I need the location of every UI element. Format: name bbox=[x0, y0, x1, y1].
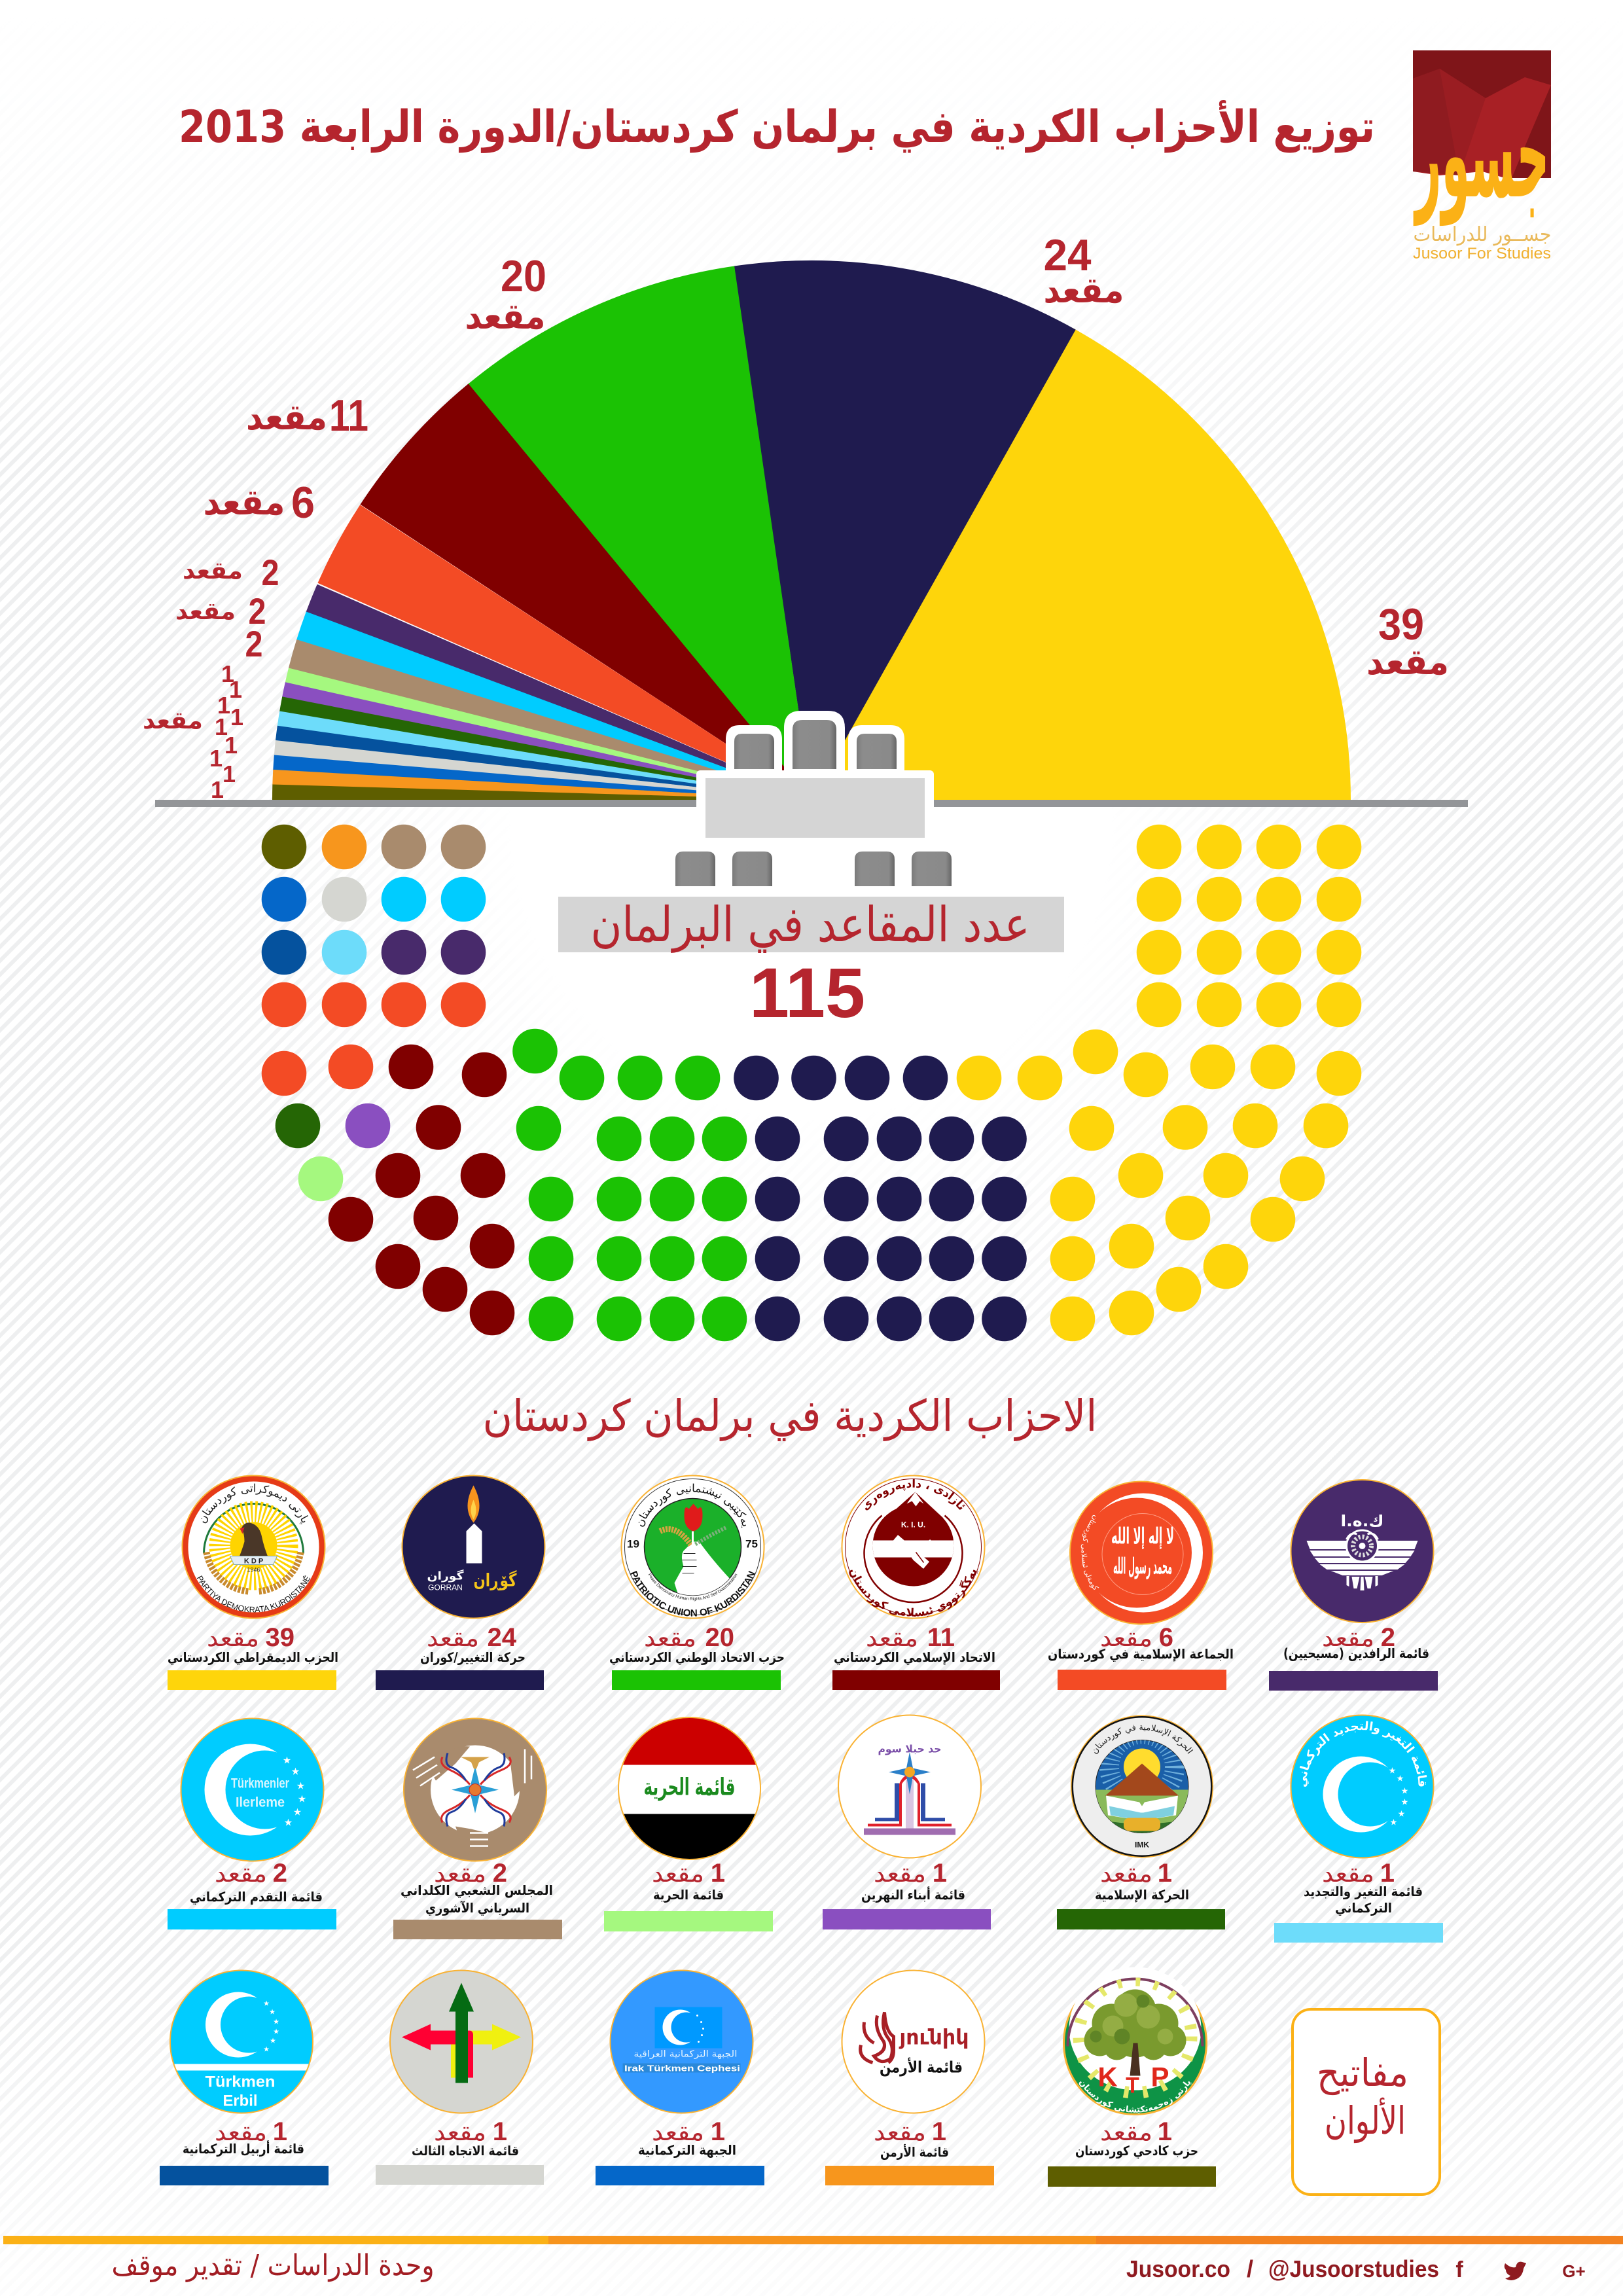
colour key bbox=[825, 2166, 994, 2185]
party card: KDP bbox=[168, 1475, 338, 1690]
seat count bbox=[644, 1623, 734, 1652]
party card: Gorran bbox=[376, 1475, 544, 1690]
seat labels on chart: 24 bbox=[1043, 230, 1092, 280]
logo: KTP tree bbox=[1063, 1967, 1207, 2115]
logo: Turkmen Progress bbox=[181, 1719, 323, 1861]
colour key bbox=[168, 1670, 336, 1690]
logo: Turkmen Change and Renewal: ★ bbox=[1390, 1818, 1397, 1827]
seat count: مقعد bbox=[652, 2119, 704, 2146]
logo: Iraqi Turkmen Front: الجبهة التركمانية العراقية bbox=[633, 2049, 737, 2059]
party card: Turkmen Front bbox=[596, 1970, 764, 2185]
logo: PUK: 75 bbox=[745, 1538, 758, 1550]
logo: PUK bbox=[620, 1475, 764, 1619]
seat count: مقعد bbox=[215, 2119, 267, 2146]
seat count: مقعد bbox=[1100, 1625, 1152, 1652]
dots: navy bbox=[734, 1056, 1027, 1341]
logo: Jusoor for Studies: Jusoor For Studies bbox=[1413, 245, 1551, 262]
seat count bbox=[427, 1623, 517, 1652]
party name: الجماعة الإسلامية في كوردستان bbox=[1048, 1646, 1234, 1662]
party card: Third Direction bbox=[376, 1970, 544, 2185]
seat count: 6 bbox=[1159, 1623, 1173, 1652]
logo: Jusoor for Studies: جســور للدراسات bbox=[1414, 223, 1551, 246]
party name: المجلس الشعبي الكلداني bbox=[401, 1882, 553, 1899]
logo: Turkmen Erbil: ★ bbox=[263, 1999, 270, 2008]
footer: unit label: وحدة الدراسات / تقدير موقف bbox=[111, 2249, 435, 2282]
logo: Turkmen Progress: Ilerleme bbox=[236, 1795, 285, 1810]
seat count: 1 bbox=[493, 2117, 507, 2146]
party name: حركة التغيير/كوران bbox=[420, 1649, 526, 1665]
seat count: 11 bbox=[927, 1623, 955, 1652]
logo: PUK: 19 bbox=[627, 1538, 639, 1550]
dots: yellow bbox=[957, 825, 1361, 1341]
seat count: مقعد bbox=[1322, 1625, 1374, 1652]
logo: Gorran candle bbox=[402, 1475, 544, 1618]
logo: KDP bbox=[182, 1475, 325, 1618]
dots: tan bbox=[382, 825, 486, 869]
seat count bbox=[866, 1623, 955, 1652]
seat count bbox=[215, 2117, 287, 2146]
logo: Turkmen Erbil: ★ bbox=[273, 2028, 279, 2036]
seat labels on chart: 1 bbox=[215, 713, 228, 740]
logo: Sons of Two Rivers bbox=[838, 1715, 981, 1857]
logo: Turkmen Progress: ★ bbox=[296, 1780, 305, 1792]
logo: Gorran candle: GORRAN bbox=[428, 1583, 463, 1592]
party name: قائمة أربيل التركمانية bbox=[183, 2140, 304, 2157]
seat labels on chart: مقعد bbox=[1366, 641, 1449, 683]
seat count: 1 bbox=[932, 2117, 946, 2146]
logo: KIU: ئازادی ، دادپەروەری bbox=[865, 1479, 965, 1511]
logo: Armenian list: յունիկ bbox=[899, 2025, 969, 2050]
party name: قائمة أبناء النهرين bbox=[861, 1886, 965, 1903]
colour key bbox=[376, 1670, 544, 1690]
logo: Islamic Group bbox=[1070, 1482, 1213, 1624]
logo: KIU: K. I. U. bbox=[901, 1520, 925, 1529]
logo: Turkmen Erbil: Erbil bbox=[223, 2092, 258, 2110]
colour key bbox=[832, 1670, 1000, 1690]
seat labels on chart: 2 bbox=[262, 552, 279, 593]
logo: Turkmen Progress: ★ bbox=[298, 1793, 306, 1805]
colour key bbox=[1057, 1909, 1225, 1929]
baseline bar bbox=[155, 800, 1468, 807]
party card: Chaldean Syriac Assyrian Council bbox=[393, 1719, 562, 1939]
seat labels on chart: 2 bbox=[249, 590, 266, 632]
seat labels on chart: 6 bbox=[291, 478, 315, 528]
party name: حزب كادحي كوردستان bbox=[1075, 2143, 1198, 2159]
logo: Turkmen Erbil: ★ bbox=[269, 2008, 276, 2016]
seat count: مقعد bbox=[434, 1861, 486, 1888]
dots: maroon bbox=[329, 1045, 514, 1335]
seat count: مقعد bbox=[874, 1861, 926, 1888]
logo: Turkmen Progress: ★ bbox=[284, 1817, 293, 1829]
dots: blues and grey bbox=[262, 877, 486, 975]
seat labels on chart bbox=[143, 230, 1449, 803]
seat labels on chart: 1 bbox=[211, 776, 224, 803]
logo: Turkmen Progress: ★ bbox=[291, 1766, 300, 1778]
logo: KIU bbox=[842, 1475, 986, 1619]
colour key bbox=[1269, 1671, 1438, 1691]
seat count bbox=[434, 2117, 507, 2146]
logo: Islamic Group: لا إله إلا الله bbox=[1111, 1524, 1174, 1550]
seat count: مقعد bbox=[874, 2119, 926, 2146]
seat count: مقعد bbox=[215, 1861, 267, 1888]
logo: Turkmen Change and Renewal: ★ bbox=[1397, 1774, 1404, 1784]
party card: Islamic Group bbox=[1048, 1482, 1234, 1690]
logo: KTP tree: K bbox=[1097, 2062, 1118, 2092]
footer colour bar bbox=[3, 2236, 1623, 2244]
logo: PUK: یەکێتیی نیشتمانیی کوردستان bbox=[639, 1483, 747, 1528]
seat labels on chart: مقعد bbox=[143, 708, 203, 734]
logo: Islamic Movement: الحركة الإسلامية في كوردستان bbox=[1094, 1725, 1194, 1754]
party card: Armenians bbox=[825, 1970, 994, 2185]
party card: Turkmen Change and Renewal bbox=[1274, 1715, 1443, 1943]
party name: حزب الاتحاد الوطني الكردستاني bbox=[609, 1649, 785, 1666]
party card: Kurdistan Toilers bbox=[1048, 1967, 1216, 2187]
logo: Turkmen Progress: ★ bbox=[283, 1754, 291, 1766]
logo: Iraqi Turkmen Front: Irak Türkmen Cephesi bbox=[624, 2063, 740, 2073]
seat count bbox=[207, 1623, 294, 1652]
party card: Islamic Movement bbox=[1057, 1715, 1225, 1929]
seat labels on chart: مقعد bbox=[1043, 270, 1124, 311]
party name bbox=[401, 1882, 553, 1916]
party name: قائمة الحرية bbox=[653, 1887, 724, 1903]
seat count: 1 bbox=[711, 2117, 725, 2146]
dots: green bbox=[512, 1029, 747, 1341]
party name: السرياني الآشوري bbox=[425, 1900, 529, 1916]
logo: Turkmen Change and Renewal bbox=[1291, 1715, 1433, 1857]
seat count: مقعد bbox=[1322, 1861, 1374, 1888]
seat count: 2 bbox=[493, 1859, 507, 1888]
logo: KIU: یەکگرتووی ئیسلامی کوردستان bbox=[849, 1570, 978, 1617]
party name: قائمة الاتجاه الثالث bbox=[412, 2143, 519, 2159]
logo: Armenian list: قائمة الأرمن bbox=[880, 2058, 963, 2076]
party name bbox=[1304, 1884, 1423, 1916]
icon: google plus: G+ bbox=[1562, 2261, 1586, 2281]
colour key bbox=[168, 1909, 336, 1929]
seat dots: 115 seats bbox=[262, 825, 1361, 1341]
podium: table and chairs bbox=[675, 711, 952, 886]
party card: Rafidain bbox=[1269, 1480, 1438, 1691]
seat count: 39 bbox=[266, 1623, 294, 1652]
seat count: 1 bbox=[933, 1859, 947, 1888]
logo: Turkmen Erbil bbox=[169, 1970, 313, 2113]
logo: Assyrian winged disc: ك.ه.ا bbox=[1340, 1512, 1383, 1530]
logo: Turkmen Change and Renewal: ★ bbox=[1401, 1797, 1408, 1808]
dots: single seats bbox=[276, 1103, 390, 1201]
seat labels on chart: 20 bbox=[501, 251, 546, 301]
seat labels on chart: 2 bbox=[245, 623, 263, 664]
party card: PUK bbox=[609, 1475, 785, 1690]
chart: semicircle parliament seat shares bbox=[432, 420, 1191, 1179]
seat count: 24 bbox=[487, 1623, 517, 1652]
logo: Third Direction arrows bbox=[390, 1970, 533, 2113]
logo: Freedom List flag bbox=[618, 1716, 762, 1860]
colour key bbox=[604, 1911, 773, 1931]
party name: الاتحاد الإسلامي الكردستاني bbox=[834, 1649, 995, 1666]
logo: KTP tree: پارتی زەحمەتکێشانی کوردستان bbox=[1079, 2081, 1192, 2114]
colour key box bbox=[1293, 2009, 1440, 2195]
seat labels on chart: مقعد bbox=[465, 296, 546, 337]
party name: قائمة التغير والتجديد bbox=[1304, 1884, 1423, 1899]
seat labels on chart: مقعد bbox=[203, 482, 285, 523]
seat count bbox=[215, 1859, 287, 1888]
seat count bbox=[1322, 1623, 1395, 1652]
seat count: 1 bbox=[1158, 1859, 1172, 1888]
seat labels on chart: 39 bbox=[1378, 600, 1424, 649]
logo: Armenian list bbox=[842, 1970, 984, 2113]
logo: KDP: پارتی دیموکراتی کوردستان bbox=[202, 1483, 308, 1524]
logo: Turkmen Erbil: Türkmen bbox=[205, 2073, 275, 2090]
colour key bbox=[160, 2166, 329, 2185]
logo: PUK: Peace Democracy Human Rights And Self Determination bbox=[648, 1573, 738, 1601]
seat count bbox=[1100, 1623, 1173, 1652]
seat count: مقعد bbox=[1100, 2119, 1152, 2146]
party card: Sons of Two Rivers bbox=[823, 1715, 991, 1929]
party card: Turkmen Progress bbox=[168, 1719, 336, 1929]
party card: Freedom List bbox=[604, 1716, 773, 1931]
seat count bbox=[434, 1859, 507, 1888]
party name: قائمة التقدم التركماني bbox=[190, 1889, 323, 1905]
party name: الحركة الإسلامية bbox=[1095, 1887, 1189, 1903]
logo: KDP: K D P bbox=[244, 1558, 263, 1566]
logo: Turkmen Erbil: ★ bbox=[270, 2037, 276, 2045]
seat count: 1 bbox=[273, 2117, 287, 2146]
title: توزيع الأحزاب الكردية في برلمان كردستان/الدورة الرابعة 2013 bbox=[179, 99, 1375, 153]
logo: Gorran candle: گۆڕان bbox=[474, 1570, 517, 1590]
seat labels on chart: 1 bbox=[229, 676, 242, 703]
seat labels on chart: 1 bbox=[209, 745, 223, 772]
seat count bbox=[652, 2117, 725, 2146]
logo: Assyrian winged disc bbox=[1291, 1480, 1433, 1623]
seat count: 1 bbox=[711, 1859, 725, 1888]
seat count bbox=[874, 1859, 947, 1888]
seat count: مقعد bbox=[652, 1861, 704, 1888]
logo: Islamic Movement: IMK bbox=[1135, 1840, 1149, 1850]
logo: Islamic Movement bbox=[1071, 1715, 1213, 1857]
logo: KDP: 1946 bbox=[247, 1567, 260, 1573]
seat count: مقعد bbox=[427, 1625, 479, 1652]
logo: Islamic Group: كومةلى ئيسلامى كوردستان bbox=[1081, 1515, 1099, 1590]
seat labels on chart: مقعد bbox=[183, 558, 243, 584]
seat count: 1 bbox=[1380, 1859, 1395, 1888]
seat labels on chart: 1 bbox=[221, 660, 234, 687]
dots: olive and orange bbox=[262, 825, 366, 869]
footer: website and social: @Jusoorstudies bbox=[1268, 2255, 1439, 2282]
logo: Gorran candle: گوران bbox=[427, 1570, 464, 1583]
logo: Islamic Group: محمد رسول الله bbox=[1113, 1554, 1172, 1580]
logo: KDP: PARTIYA DEMOKRATA KURDISTANÊ bbox=[196, 1575, 310, 1613]
seat count: مقعد bbox=[207, 1625, 259, 1652]
seat count bbox=[1322, 1859, 1395, 1888]
colour key bbox=[612, 1670, 781, 1690]
logo: Assyrian council bbox=[404, 1719, 546, 1861]
logo: Turkmen Progress: ★ bbox=[293, 1806, 302, 1818]
logo: Turkmen Erbil: ★ bbox=[263, 2045, 270, 2054]
logo: Sons of Two Rivers: حد حبلا سوم bbox=[878, 1742, 941, 1755]
seat count: مقعد bbox=[434, 2119, 486, 2146]
seat count bbox=[1100, 1859, 1172, 1888]
seat labels on chart: مقعد bbox=[175, 598, 236, 625]
seat count: مقعد bbox=[1100, 1861, 1152, 1888]
logo: Iraqi Turkmen Front bbox=[610, 1970, 753, 2113]
colour key bbox=[1048, 2166, 1216, 2187]
logo: Turkmen Progress: Türkmenler bbox=[231, 1776, 289, 1791]
dots: orange-red bbox=[262, 982, 486, 1096]
section heading: الاحزاب الكردية في برلمان كردستان bbox=[483, 1391, 1097, 1441]
seat labels on chart: 1 bbox=[217, 692, 230, 719]
party name: قائمة الأرمن bbox=[880, 2144, 949, 2160]
icon: twitter bbox=[1505, 2262, 1526, 2280]
party name: التركماني bbox=[1335, 1900, 1392, 1916]
seat count: 1 bbox=[1158, 2117, 1172, 2146]
party card: KIU bbox=[832, 1475, 1000, 1690]
colour key bbox=[1274, 1923, 1443, 1943]
colour key box: الألوان bbox=[1325, 2097, 1406, 2144]
logo: Turkmen Change and Renewal: ★ bbox=[1398, 1809, 1405, 1820]
seat count: مقعد bbox=[866, 1625, 918, 1652]
colour key bbox=[376, 2165, 544, 2185]
seat labels on chart: 1 bbox=[223, 761, 236, 787]
party name: الجبهة التركمانية bbox=[638, 2142, 736, 2158]
party name: قائمة الرافدين (مسيحيين) bbox=[1283, 1645, 1429, 1661]
logo: Turkmen Change and Renewal: ★ bbox=[1389, 1766, 1396, 1776]
logo: KTP tree: P bbox=[1150, 2062, 1169, 2092]
seat labels on chart: 11 bbox=[329, 391, 368, 440]
footer: website and social: Jusoor.co bbox=[1126, 2255, 1230, 2282]
seat labels on chart: 1 bbox=[224, 732, 238, 759]
seat labels on chart: مقعد bbox=[246, 397, 327, 438]
party name: الحزب الديمقراطي الكردستاني bbox=[168, 1649, 338, 1666]
logo: KTP tree: T bbox=[1126, 2073, 1139, 2098]
colour key bbox=[1058, 1670, 1226, 1690]
seat labels on chart: 1 bbox=[230, 704, 243, 730]
logo: Freedom List flag: قائمة الحرية bbox=[644, 1774, 736, 1801]
colour key bbox=[596, 2166, 764, 2185]
party card: Erbil Turkmen bbox=[160, 1970, 329, 2185]
seat count bbox=[652, 1859, 725, 1888]
logo: Jusoor for Studies bbox=[1413, 50, 1551, 262]
total seats 115: 115 bbox=[749, 953, 865, 1032]
seat count bbox=[874, 2117, 946, 2146]
seat count: 2 bbox=[1381, 1623, 1395, 1652]
colour key box: مفاتيح bbox=[1317, 2051, 1408, 2095]
logo: Turkmen Change and Renewal: قائمة التغير والتجديد التركماني bbox=[1300, 1721, 1427, 1787]
footer: website and social bbox=[1126, 2255, 1586, 2282]
colour key bbox=[393, 1920, 562, 1939]
seat count: 20 bbox=[705, 1623, 734, 1652]
seat count bbox=[1100, 2117, 1172, 2146]
colour key bbox=[823, 1909, 991, 1929]
logo: PUK: PATRIOTIC UNION OF KURDISTAN bbox=[630, 1571, 755, 1617]
seat count: مقعد bbox=[644, 1625, 696, 1652]
footer: website and social: / bbox=[1247, 2255, 1253, 2282]
seat count: 2 bbox=[273, 1859, 287, 1888]
logo: Turkmen Erbil: ★ bbox=[273, 2017, 279, 2026]
icon: facebook: f bbox=[1455, 2257, 1463, 2282]
logo: Turkmen Change and Renewal: ★ bbox=[1401, 1787, 1408, 1796]
seat count heading: عدد المقاعد في البرلمان bbox=[590, 897, 1030, 953]
